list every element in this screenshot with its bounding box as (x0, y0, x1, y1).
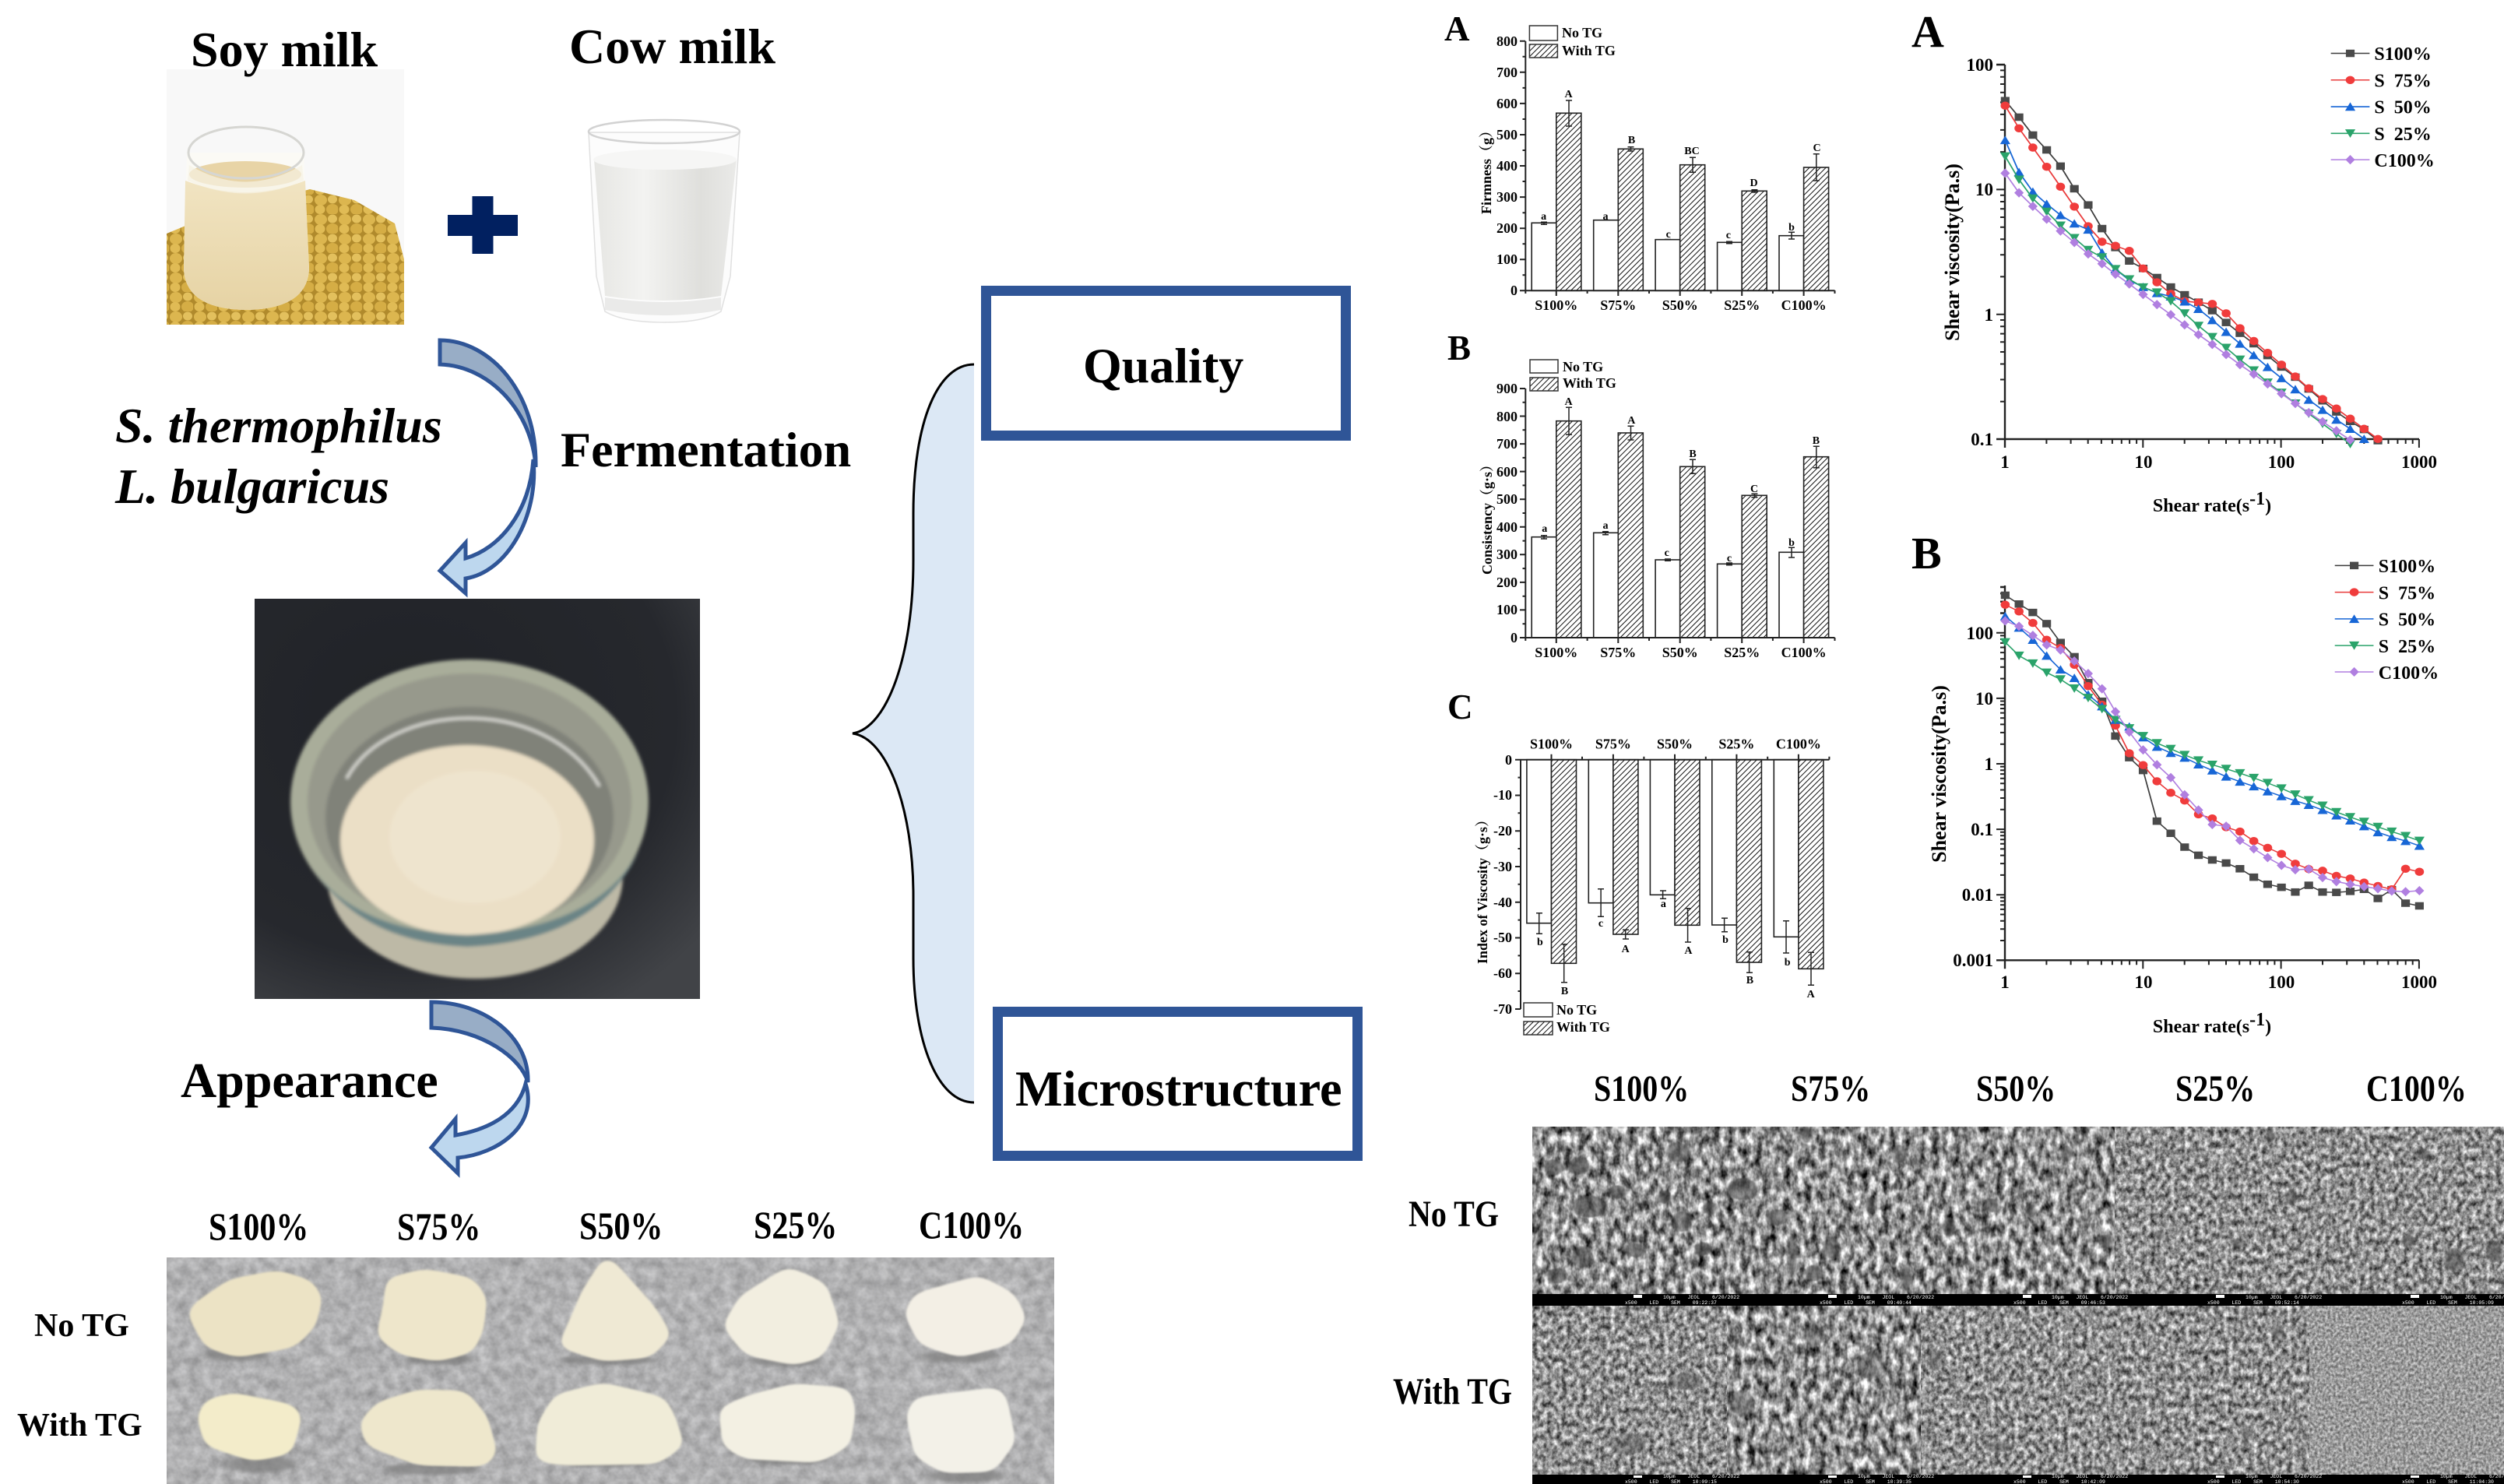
category labels: S75% (1600, 297, 1636, 313)
tick labels: 1 (1984, 754, 1993, 774)
category labels: S100% (1535, 645, 1577, 660)
y tick labels: -60 (1493, 965, 1512, 981)
category labels: S75% (1595, 737, 1631, 752)
legend: With TG (1562, 43, 1616, 58)
column headers: appearance photos: S75% (397, 1205, 480, 1248)
significance letters: b (1537, 937, 1543, 948)
tick labels: 100 (2268, 972, 2295, 992)
significance letters: c (1666, 229, 1671, 241)
tick labels: 10 (2135, 452, 2152, 472)
legend (1524, 1002, 1610, 1035)
y tick labels: 800 (1496, 33, 1518, 49)
SEM row: No TG (1532, 1127, 2504, 1294)
significance letters: a (1661, 898, 1666, 910)
category labels: S75% (1600, 645, 1636, 660)
scale bars: No TG: x500 LED SEM 09:46:53 (2013, 1300, 2105, 1306)
legend: No TG (1556, 1002, 1597, 1018)
photo: soy milk glass on soybeans (167, 69, 404, 325)
category labels: S25% (1724, 297, 1760, 313)
tick labels: 1 (1984, 305, 1993, 325)
y tick labels: -20 (1493, 823, 1512, 839)
arrow: fermentation curved arrow (440, 340, 536, 593)
category labels: S25% (1718, 737, 1754, 752)
tick labels: 100 (2268, 452, 2295, 472)
tick labels: 10 (2135, 972, 2152, 992)
scale bars: No TG: x500 LED SEM 09:40:44 (1820, 1300, 1911, 1306)
legend: S 25% (2379, 637, 2435, 657)
scale bars: No TG (1532, 1294, 2504, 1306)
category labels: S100% (1530, 737, 1573, 752)
line chart B: shear viscosity with TG: ) (2265, 1017, 2271, 1037)
photo: cow milk glass (589, 120, 740, 322)
legend (2335, 557, 2439, 684)
heading: Soy milk: Soy milk (191, 22, 378, 77)
category labels: C100% (1781, 297, 1827, 313)
tick labels: 1000 (2401, 972, 2437, 992)
tick labels: 100 (1967, 624, 1993, 643)
tick labels: 0.1 (1971, 820, 1993, 839)
legend (2331, 44, 2435, 171)
scale bars: No TG: x500 LED SEM 09:52:14 (2207, 1300, 2299, 1306)
bars: No TG (1532, 533, 1804, 638)
y tick labels: -40 (1493, 895, 1512, 910)
tick labels: 10 (1975, 689, 1993, 709)
category labels: C100% (1781, 645, 1827, 660)
row label: With TG: With TG (17, 1408, 142, 1444)
line chart B: shear viscosity with TG: Shear rate(s (2153, 1017, 2249, 1037)
axes (1996, 586, 2419, 969)
scale bars: With TG: 10µm JEOL 6/20/2022 (1663, 1474, 1739, 1479)
line chart A: shear viscosity without TG: A (1911, 6, 1944, 57)
significance letters: A (1565, 396, 1574, 408)
bar chart B: consistency (1447, 329, 1834, 660)
y tick labels: 500 (1496, 491, 1518, 507)
line chart B: shear viscosity with TG: B (1911, 528, 1942, 578)
bars: No TG (1527, 760, 1799, 937)
category labels: S50% (1662, 645, 1698, 660)
significance letters: A (1807, 989, 1816, 1000)
y tick labels: 500 (1496, 127, 1518, 142)
y axis title: Firmness（g） (1479, 124, 1494, 214)
line chart A: shear viscosity without TG (1911, 6, 2437, 516)
y tick labels: 400 (1496, 158, 1518, 174)
y tick labels: 0 (1510, 283, 1518, 298)
scale bars: With TG: 10µm JEOL 6/20/2022 (1858, 1474, 1934, 1479)
significance letters: D (1750, 178, 1758, 189)
box: Microstructure (998, 1012, 1358, 1155)
line chart A: shear viscosity without TG: ) (2265, 496, 2271, 516)
legend: S 75% (2374, 71, 2432, 91)
significance letters: c (1598, 918, 1603, 930)
line chart A: shear viscosity without TG: -1 (2249, 489, 2265, 509)
significance letters: A (1684, 945, 1693, 957)
significance letters: B (1689, 448, 1697, 460)
row label: SEM No TG: No TG (1408, 1194, 1499, 1235)
bars: With TG (1551, 760, 1823, 969)
text: bacterial strains: S. thermophilus (115, 398, 442, 453)
line chart B: shear viscosity with TG: -1 (2249, 1010, 2265, 1030)
scale bars: With TG: 10µm JEOL 6/20/2022 (2052, 1474, 2128, 1479)
text: bacterial strains: L. bulgaricus (114, 459, 389, 514)
significance letters: A (1565, 89, 1574, 100)
category labels: S50% (1657, 737, 1693, 752)
significance letters: B (1813, 435, 1820, 447)
line chart B: shear viscosity with TG (1911, 528, 2439, 1037)
y tick labels: 800 (1496, 409, 1518, 424)
y tick labels: 400 (1496, 519, 1518, 535)
tick labels: 100 (1967, 55, 1993, 75)
bar chart A: firmness: A (1444, 9, 1470, 48)
legend: C100% (2374, 151, 2435, 171)
axes (1515, 754, 1829, 1009)
y tick labels: 100 (1496, 602, 1518, 617)
significance letters: BC (1684, 146, 1700, 157)
box: Microstructure: Microstructure (1015, 1061, 1342, 1117)
column headers: SEM micrographs (1594, 1069, 2467, 1109)
scale bars: No TG: 10µm JEOL 6/20/2022 (1663, 1295, 1739, 1300)
bar chart A: firmness (1444, 9, 1834, 313)
heading: Cow milk: Cow milk (569, 19, 775, 74)
tick labels (1953, 624, 2437, 992)
y tick labels: 300 (1496, 189, 1518, 205)
axes (1996, 65, 2419, 448)
y tick labels: 200 (1496, 220, 1518, 236)
scale bars: No TG: x500 LED SEM 10:05:09 (2402, 1300, 2494, 1306)
tick labels: 0.01 (1962, 885, 1993, 905)
y tick labels: 700 (1496, 65, 1518, 80)
column headers: appearance photos: C100% (919, 1204, 1024, 1247)
significance letters: C (1750, 484, 1758, 495)
y tick labels: -30 (1493, 859, 1512, 874)
scale bars: No TG: 10µm JEOL 6/20/2022 (2246, 1295, 2322, 1300)
column headers: appearance photos: S50% (579, 1204, 663, 1247)
label: Appearance: Appearance (181, 1053, 438, 1108)
error bars (1541, 100, 1820, 244)
significance letters: c (1727, 553, 1732, 564)
y tick labels: 700 (1496, 436, 1518, 452)
legend: S100% (2379, 557, 2435, 577)
row label: No TG: No TG (34, 1308, 129, 1344)
bar chart B: consistency: B (1447, 329, 1471, 367)
significance letters: b (1785, 957, 1791, 969)
y axis title: Consistency（g·s） (1479, 458, 1495, 575)
row label: SEM With TG: With TG (1393, 1372, 1512, 1412)
significance letters (1537, 898, 1816, 1000)
significance letters: A (1622, 944, 1630, 955)
category labels: S100% (1535, 297, 1577, 313)
y tick labels (1496, 381, 1518, 645)
category labels (1535, 645, 1827, 660)
legend: S100% (2374, 44, 2432, 65)
axis titles: Shear viscosity(Pa.s) (1941, 164, 1964, 341)
tick labels: 1 (2000, 972, 2010, 992)
y tick labels: 200 (1496, 575, 1518, 590)
significance letters (1542, 396, 1820, 564)
axis titles: Shear viscosity(Pa.s) (1928, 685, 1950, 863)
scale bars: No TG: 10µm JEOL 6/20/2022 (2052, 1295, 2128, 1300)
significance letters: c (1726, 230, 1731, 241)
text: bacterial strains (114, 398, 442, 514)
y axis title: Index of Viscosity（g·s） (1475, 813, 1490, 964)
significance letters: a (1602, 520, 1609, 532)
arrow: appearance curved arrow (431, 1002, 528, 1173)
column headers: appearance photos: S25% (754, 1204, 837, 1247)
tick labels: 0.001 (1953, 951, 1993, 970)
category labels (1530, 737, 1821, 752)
y tick labels: 600 (1496, 464, 1518, 480)
y tick labels: 100 (1496, 251, 1518, 267)
legend: S 25% (2374, 125, 2432, 145)
y tick labels (1496, 33, 1518, 298)
box: Quality: Quality (1083, 338, 1243, 393)
category labels: S50% (1662, 297, 1698, 313)
box: Quality (986, 291, 1345, 436)
category labels (1535, 297, 1827, 313)
axes (1520, 41, 1834, 296)
bars: With TG (1556, 421, 1829, 638)
bar chart C: index of viscosity (1447, 687, 1829, 1035)
y tick labels: 0 (1505, 752, 1512, 768)
brace: connects yogurt to quality and microstructure (853, 364, 974, 1102)
icon: plus sign (448, 196, 518, 254)
legend: S 50% (2374, 98, 2432, 118)
significance letters: B (1746, 975, 1753, 986)
significance letters: A (1627, 415, 1636, 427)
significance letters: b (1788, 537, 1795, 549)
y tick labels: 600 (1496, 96, 1518, 111)
significance letters: B (1561, 986, 1568, 997)
significance letters: c (1665, 547, 1669, 559)
label: Fermentation: Fermentation (561, 422, 851, 477)
bars: No TG (1532, 220, 1804, 290)
column headers: SEM micrographs: S100% (1594, 1069, 1689, 1109)
photo: fermented yogurt in glass jar (255, 599, 700, 999)
significance letters: a (1541, 211, 1546, 223)
y tick labels: 300 (1496, 547, 1518, 562)
column headers: SEM micrographs: S75% (1791, 1069, 1870, 1109)
legend: No TG (1563, 359, 1603, 375)
legend: S 75% (2379, 583, 2435, 603)
SEM row: With TG (1532, 1306, 2504, 1475)
legend: With TG (1563, 375, 1616, 391)
significance letters: C (1813, 142, 1821, 154)
y tick labels: -10 (1493, 787, 1512, 803)
line chart A: shear viscosity without TG: Shear rate(s (2153, 496, 2249, 516)
tick labels: 0.1 (1971, 430, 1993, 449)
scale bars: With TG: 10µm JEOL 6/20/2022 (2246, 1474, 2322, 1479)
column headers: SEM micrographs: S50% (1976, 1069, 2056, 1109)
y tick labels: 0 (1510, 630, 1518, 645)
column headers: SEM micrographs: S25% (2175, 1069, 2255, 1109)
y tick labels: 900 (1496, 381, 1518, 396)
significance letters: B (1628, 135, 1635, 146)
legend (1530, 359, 1616, 391)
legend: With TG (1556, 1019, 1610, 1035)
data series (2005, 100, 2378, 444)
tick labels: 1000 (2401, 452, 2437, 472)
legend (1529, 25, 1616, 58)
y tick labels: -70 (1493, 1001, 1512, 1017)
axes (1520, 389, 1834, 643)
bar chart C: index of viscosity: C (1447, 687, 1473, 726)
category labels: C100% (1776, 737, 1821, 752)
significance letters: a (1602, 211, 1609, 223)
column headers: appearance photos: S100% (209, 1205, 308, 1248)
significance letters (1541, 89, 1821, 241)
significance letters: b (1722, 934, 1729, 946)
tick labels: 1 (2000, 452, 2010, 472)
error bars (1536, 889, 1814, 985)
legend: S 50% (2379, 610, 2435, 631)
legend: No TG (1562, 25, 1602, 40)
bars: With TG (1556, 113, 1829, 290)
column headers: SEM micrographs: C100% (2366, 1069, 2467, 1109)
photo grid: yogurt gels (167, 1254, 1054, 1484)
scale bars: No TG: 10µm JEOL 6/20/2022 (1858, 1295, 1934, 1300)
tick labels (1967, 55, 2437, 472)
tick labels: 10 (1975, 180, 1993, 199)
category labels: S25% (1724, 645, 1760, 660)
y tick labels: -50 (1493, 930, 1512, 945)
data series (2005, 596, 2419, 906)
scale bars: No TG: x500 LED SEM 09:22:37 (1625, 1300, 1717, 1306)
column headers: appearance photos (209, 1204, 1024, 1248)
scale bars: With TG (1532, 1474, 2504, 1484)
error bars (1541, 407, 1820, 565)
y tick labels (1493, 752, 1512, 1017)
significance letters: a (1542, 523, 1547, 535)
significance letters: b (1788, 222, 1795, 234)
SEM micrograph grid (1532, 1127, 2504, 1484)
legend: C100% (2379, 663, 2439, 684)
